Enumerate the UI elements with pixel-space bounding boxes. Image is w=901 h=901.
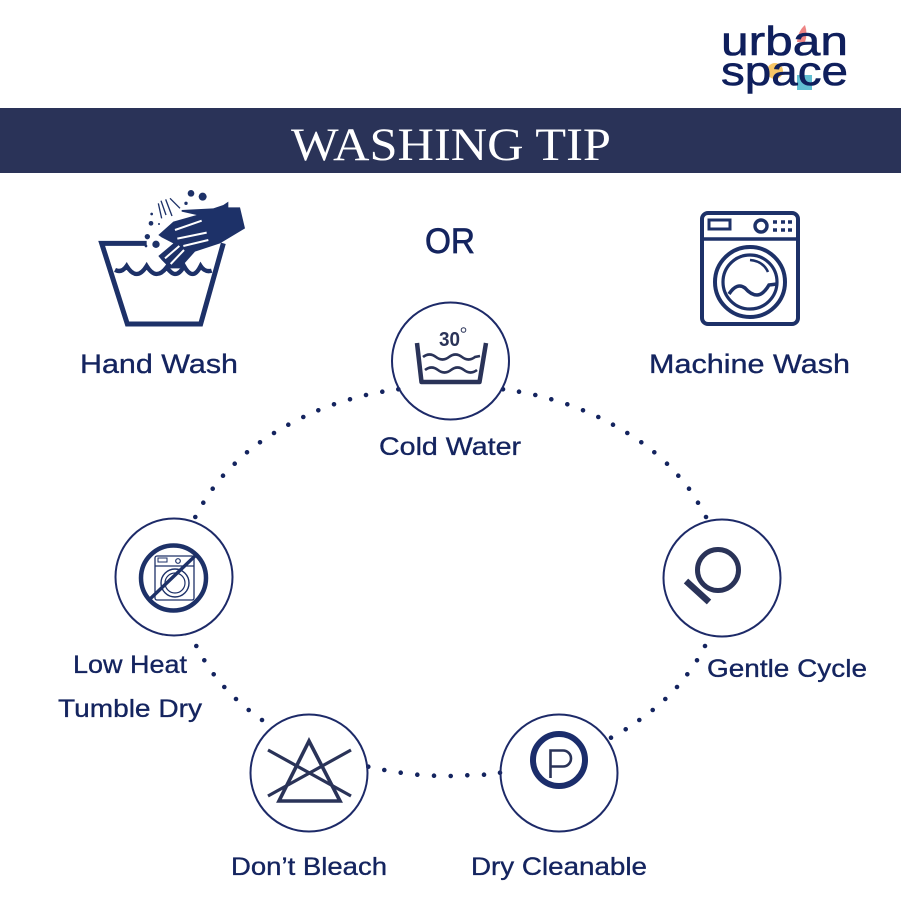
logo: urban space [721,18,848,94]
panel: low heat tumble dry [58,518,232,723]
panel: don't bleach: Don’t Bleach [231,853,387,881]
panel: don't bleach [231,714,387,881]
icon: hand wash [102,190,245,324]
panel: gentle cycle [664,520,867,683]
panel: cold water: 30 [439,329,460,351]
panel: cold water: Cold Water [379,433,521,461]
logo: urban space: urban [721,18,848,64]
label: hand wash: Hand Wash [80,349,238,379]
panel: dry cleanable [471,714,647,881]
title banner: WASHING TIP [291,119,611,171]
panel: gentle cycle: Gentle Cycle [707,655,867,683]
label: or: OR [425,222,475,261]
logo: urban space: space [721,48,848,94]
panel: low heat tumble dry: Low Heat [73,651,187,679]
icon: washing machine [702,213,798,324]
label: machine wash: Machine Wash [649,349,850,379]
dotted ring connecting care symbols [195,389,706,776]
title banner [0,108,901,173]
panel: low heat tumble dry: Tumble Dry [58,695,203,723]
panel: dry cleanable: Dry Cleanable [471,853,647,881]
panel: cold water [379,302,521,461]
